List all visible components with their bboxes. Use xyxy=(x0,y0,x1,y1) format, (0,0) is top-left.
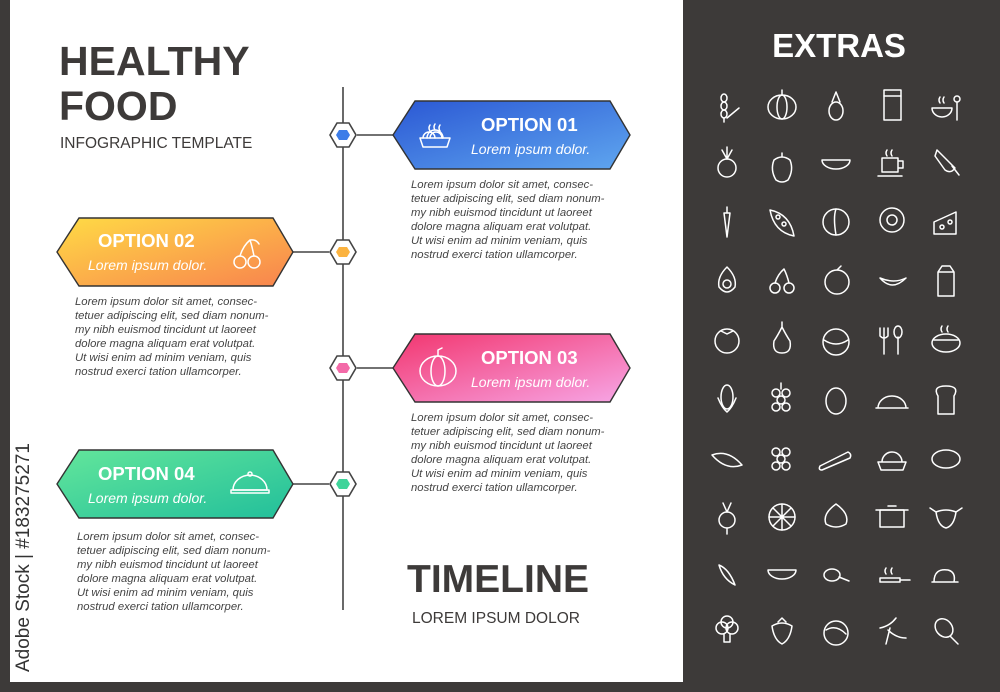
text: option 01 body: tetuer adipiscing elit, sed diam nonum- xyxy=(411,193,605,205)
icon: steak xyxy=(932,326,960,352)
text: option 04 body: Ut wisi enim ad minim veniam, quis xyxy=(77,587,254,599)
icon: chicken leg xyxy=(824,569,849,581)
text: option 04 body: nostrud exerci tation ullamcorper. xyxy=(77,601,244,613)
icon: carrot xyxy=(724,207,730,237)
icon: pot xyxy=(876,506,908,527)
timeline line xyxy=(293,87,393,610)
icon: cloche xyxy=(876,396,908,408)
icon: pear xyxy=(774,322,790,353)
heading: timeline: TIMELINE xyxy=(407,558,589,601)
banner: option 04 xyxy=(57,450,293,518)
icon: peach xyxy=(823,209,849,235)
text: option 02 body: tetuer adipiscing elit, sed diam nonum- xyxy=(75,310,269,322)
banner: option 01: OPTION 01 xyxy=(481,114,578,135)
text: option 04 body xyxy=(77,531,271,613)
icon: cup xyxy=(878,150,903,176)
node 1 xyxy=(330,123,356,147)
title: FOOD xyxy=(59,83,177,129)
text: option 03 body: my nibh euismod tincidunt ut laoreet xyxy=(411,440,593,452)
subtitle: INFOGRAPHIC TEMPLATE xyxy=(60,135,252,152)
text: option 02 body xyxy=(75,296,269,378)
text: option 02 body: nostrud exerci tation ullamcorper. xyxy=(75,366,242,378)
banner: option 02: OPTION 02 xyxy=(98,230,195,251)
icon: cherries xyxy=(234,240,260,268)
icon: peas xyxy=(712,453,742,467)
icon: pea pod xyxy=(770,210,794,236)
icon: baguette xyxy=(819,452,851,470)
text: option 04 body: Lorem ipsum dolor sit amet, consec- xyxy=(77,531,259,543)
text: option 01 body: Lorem ipsum dolor sit amet, consec- xyxy=(411,179,593,191)
icon: banana peeled xyxy=(880,618,906,644)
text: option 03 body: nostrud exerci tation ullamcorper. xyxy=(411,482,578,494)
title: HEALTHY xyxy=(59,38,250,84)
text: option 01 body: nostrud exerci tation ullamcorper. xyxy=(411,249,578,261)
icon: pumpkin xyxy=(768,90,796,119)
text: option 02 body: Ut wisi enim ad minim veniam, quis xyxy=(75,352,252,364)
icon: cloche xyxy=(231,472,269,493)
icon: wheat xyxy=(721,94,739,122)
icon: pumpkin xyxy=(420,348,456,386)
icon: melon slice xyxy=(822,160,850,169)
text: option 03 body: tetuer adipiscing elit, sed diam nonum- xyxy=(411,426,605,438)
banner: option 04: Lorem ipsum dolor. xyxy=(88,490,207,506)
panel: white main xyxy=(10,0,683,682)
subheading: lorem ipsum dolor: LOREM IPSUM DOLOR xyxy=(412,610,580,627)
icon: soup bowl xyxy=(932,96,960,120)
icon: egg fried xyxy=(880,208,904,232)
banner: option 04: OPTION 04 xyxy=(98,463,195,484)
icon: cow xyxy=(930,508,962,528)
icon: watermelon xyxy=(768,570,796,579)
icon: pepper xyxy=(772,153,792,182)
text: option 01 body: Ut wisi enim ad minim veniam, quis xyxy=(411,235,588,247)
banner: option 03 xyxy=(393,334,630,402)
banner: option 01 xyxy=(393,101,630,169)
banner: option 01: Lorem ipsum dolor. xyxy=(471,141,590,157)
icon: coconut xyxy=(823,329,849,355)
icon: chili xyxy=(719,565,735,585)
banner: option 02 xyxy=(57,218,293,286)
icon: cherries xyxy=(770,269,794,293)
icon: grapes2 xyxy=(772,448,790,470)
title xyxy=(59,38,250,129)
icon: garlic xyxy=(825,504,847,527)
icon: drumstick xyxy=(931,615,958,644)
icon: banana xyxy=(880,278,906,285)
banner: option 03: Lorem ipsum dolor. xyxy=(471,374,590,390)
text: option 01 body: dolore magna aliquam erat volutpat. xyxy=(411,221,591,233)
text: option 02 body: dolore magna aliquam erat volutpat. xyxy=(75,338,255,350)
icon: grapes xyxy=(772,383,790,411)
text: option 01 body xyxy=(411,179,605,261)
icon: radish xyxy=(935,150,959,175)
icon: cabbage xyxy=(824,621,848,645)
icon: egg xyxy=(826,388,846,414)
text: option 01 body: my nibh euismod tincidunt ut laoreet xyxy=(411,207,593,219)
icon: avocado xyxy=(719,267,735,292)
heading: extras: EXTRAS xyxy=(772,27,906,64)
text: option 02 body: my nibh euismod tincidunt ut laoreet xyxy=(75,324,257,336)
icon: apple xyxy=(825,266,849,294)
banner: option 03: OPTION 03 xyxy=(481,347,578,368)
icon: glass xyxy=(884,90,901,120)
icon: roast chicken xyxy=(932,570,958,582)
icon: noodles xyxy=(878,452,906,470)
icon: citrus slice xyxy=(769,504,795,530)
icon: beet xyxy=(719,503,735,534)
node 2 xyxy=(330,240,356,264)
icon: tomato xyxy=(715,329,739,353)
banner: option 02: Lorem ipsum dolor. xyxy=(88,257,207,273)
text: option 04 body: tetuer adipiscing elit, sed diam nonum- xyxy=(77,545,271,557)
icon: onion xyxy=(718,147,736,177)
icon grid xyxy=(712,90,962,645)
icon: cheese xyxy=(934,212,956,234)
icon: strawberry xyxy=(772,618,792,644)
icon: corn xyxy=(718,385,736,412)
watermark vertical text: Adobe Stock | #183275271 xyxy=(13,443,34,672)
text: option 03 body: dolore magna aliquam erat volutpat. xyxy=(411,454,591,466)
icon: broccoli xyxy=(716,616,738,642)
icon: fork spoon xyxy=(880,326,902,354)
text: option 02 body: Lorem ipsum dolor sit amet, consec- xyxy=(75,296,257,308)
icon: noodles bowl xyxy=(420,124,450,147)
icon: pineapple xyxy=(829,92,843,120)
text: option 03 body: Ut wisi enim ad minim veniam, quis xyxy=(411,468,588,480)
text: option 04 body: dolore magna aliquam erat volutpat. xyxy=(77,573,257,585)
text: option 04 body: my nibh euismod tincidunt ut laoreet xyxy=(77,559,259,571)
icon: bread loaf xyxy=(932,450,960,468)
node 3 xyxy=(330,356,356,380)
text: option 03 body xyxy=(411,412,605,494)
icon: frying pan xyxy=(880,568,910,582)
text: option 03 body: Lorem ipsum dolor sit amet, consec- xyxy=(411,412,593,424)
node 4 xyxy=(330,472,356,496)
icon: milk carton xyxy=(938,266,954,296)
icon: bread xyxy=(936,386,956,414)
